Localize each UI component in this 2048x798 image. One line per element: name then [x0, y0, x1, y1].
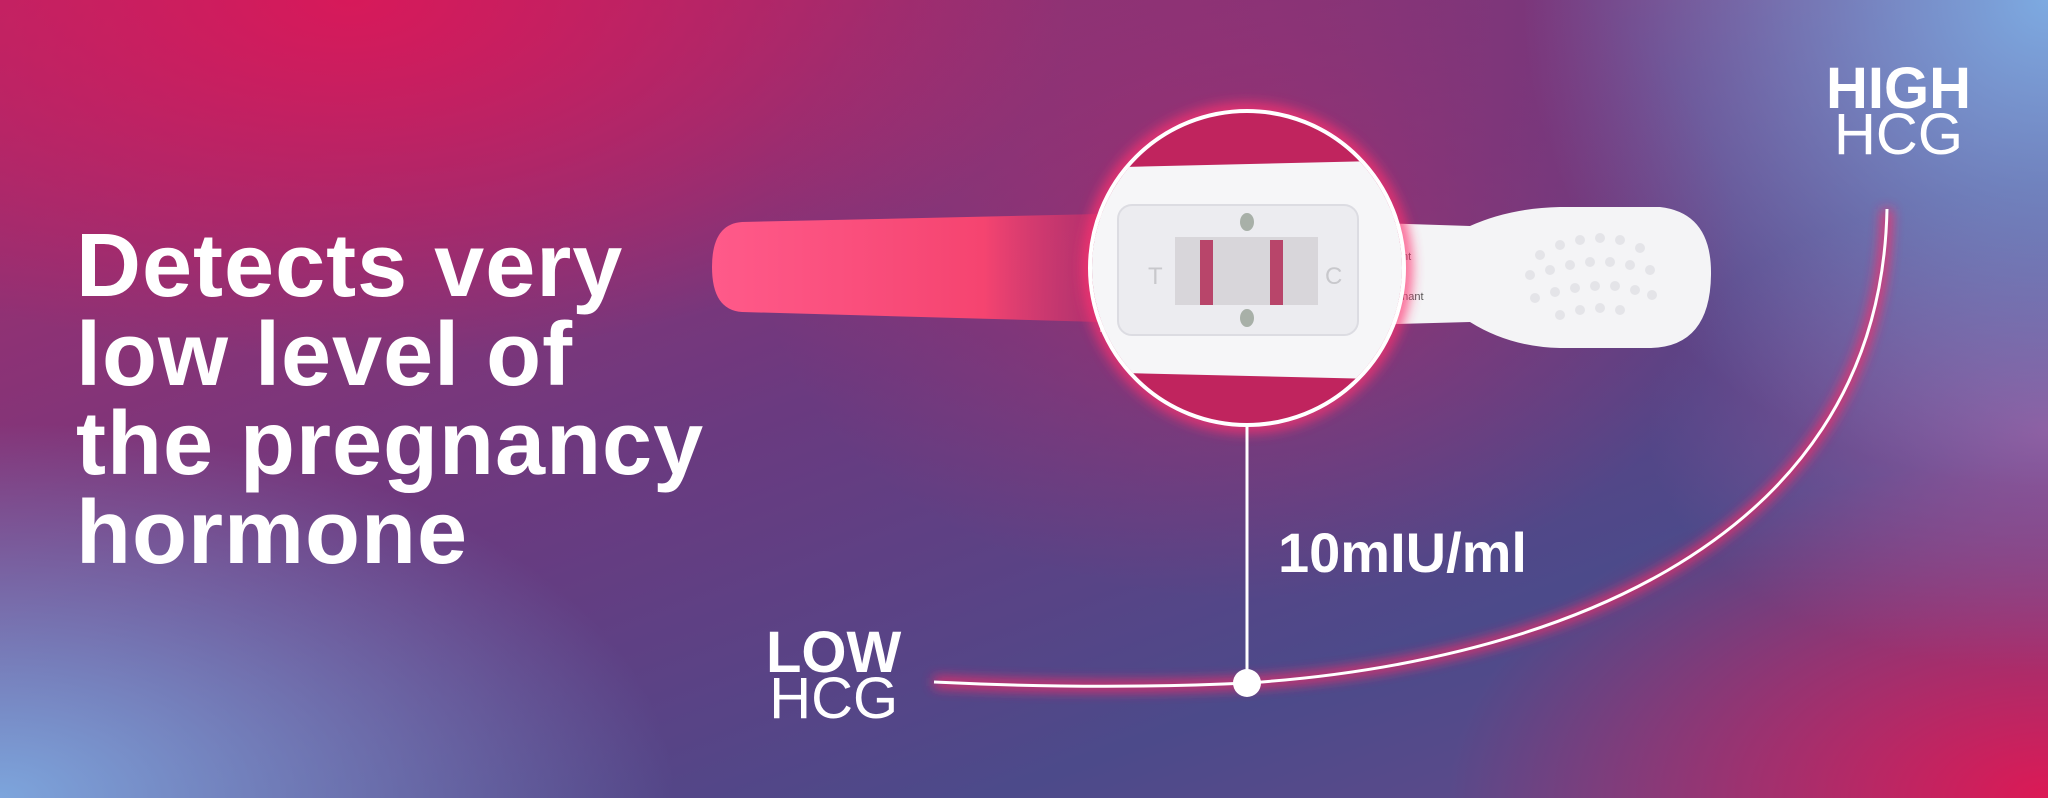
headline: Detects very	[76, 216, 623, 316]
label: high hcg: HIGH	[1826, 56, 1971, 121]
label: low hcg	[766, 620, 902, 731]
magnifier circle	[1080, 110, 1420, 430]
label: high hcg: HCG	[1834, 102, 1963, 167]
connector line	[1243, 425, 1251, 683]
result window	[1118, 205, 1358, 335]
control line C	[1270, 240, 1283, 305]
magnifier circle: T	[1148, 263, 1163, 290]
test stick: gnant	[1396, 291, 1424, 303]
marker dot	[1233, 669, 1261, 697]
headline	[76, 216, 704, 583]
magnifier circle: C	[1325, 263, 1342, 290]
test line T	[1200, 240, 1213, 305]
stick pink cap	[712, 214, 1100, 322]
test stick: nt	[1402, 251, 1411, 263]
headline: hormone	[76, 483, 468, 583]
label: low hcg: LOW	[766, 620, 901, 685]
label: sensitivity value: 10mIU/ml	[1278, 521, 1527, 584]
headline: the pregnancy	[76, 394, 704, 494]
HCG curve	[934, 209, 1887, 686]
test stick	[712, 207, 1711, 348]
headline: low level of	[76, 305, 573, 405]
label: low hcg: HCG	[769, 666, 898, 731]
handle grip dots	[1525, 233, 1657, 320]
stick white handle	[1100, 207, 1711, 348]
label: high hcg	[1826, 56, 1971, 167]
